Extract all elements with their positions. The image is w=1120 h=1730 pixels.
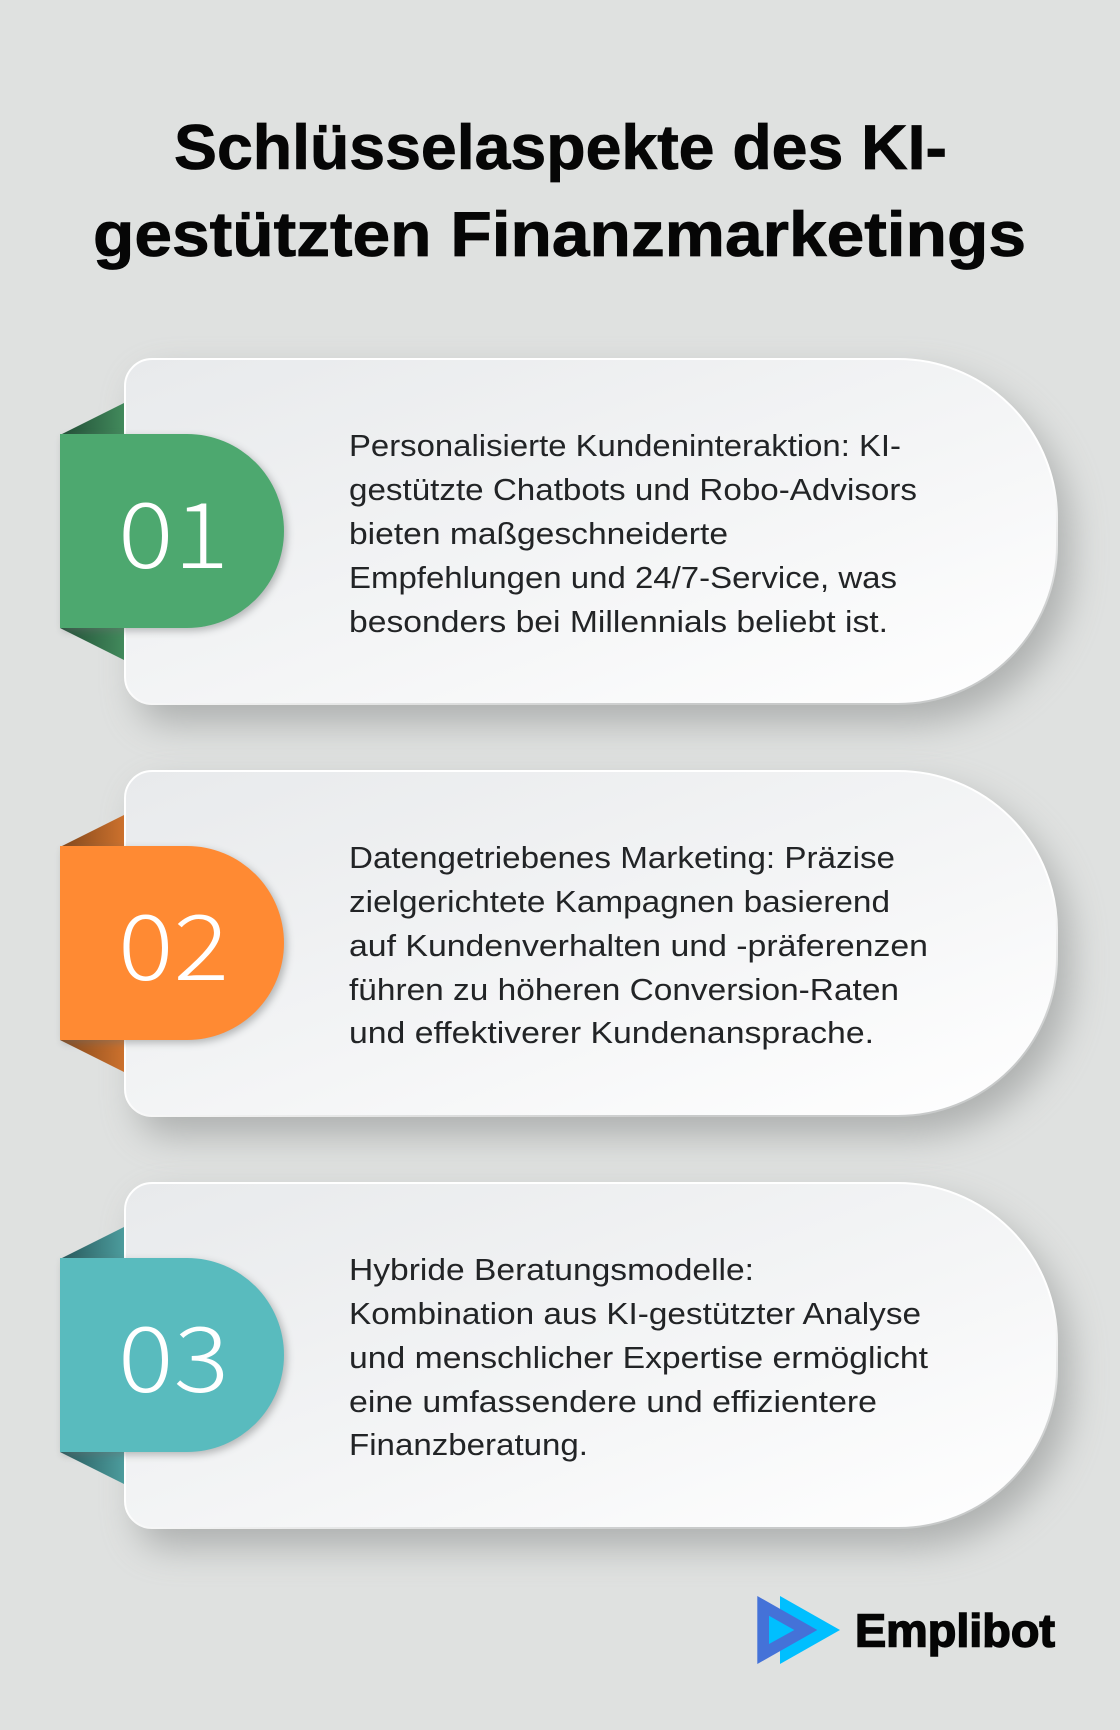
description 03: eine umfassendere und effizientere xyxy=(349,1384,877,1419)
number 03: 03 xyxy=(118,1287,229,1419)
ribbon fold top xyxy=(62,403,124,434)
description 01: gestützte Chatbots und Robo-Advisors xyxy=(349,472,917,507)
number 02: 02 xyxy=(118,875,229,1007)
title: Schlüsselaspekte des KI- xyxy=(174,113,947,183)
description 03 xyxy=(349,1252,928,1462)
wordmark: Emplibot xyxy=(855,1604,1055,1656)
description 03: und menschlicher Expertise ermöglicht xyxy=(349,1340,928,1375)
description 02: und effektiverer Kundenansprache. xyxy=(349,1015,874,1050)
description 01: Empfehlungen und 24/7-Service, was xyxy=(349,560,897,595)
description 03: Finanzberatung. xyxy=(349,1427,588,1462)
icon: play triangles xyxy=(757,1596,840,1664)
description 01: bieten maßgeschneiderte xyxy=(349,516,728,551)
description 03: Hybride Beratungsmodelle: xyxy=(349,1252,754,1287)
card background xyxy=(125,359,1057,704)
ribbon fold top xyxy=(62,815,124,846)
panel: step 02 xyxy=(60,771,1070,1135)
description 02: zielgerichtete Kampagnen basierend xyxy=(349,884,890,919)
badge shadow and shape xyxy=(60,1258,287,1455)
card background xyxy=(125,771,1057,1116)
description 01: besonders bei Millennials beliebt ist. xyxy=(349,604,888,639)
ribbon fold bottom xyxy=(60,1452,124,1484)
description 01 xyxy=(349,428,917,639)
title xyxy=(93,113,1026,270)
badge shadow and shape xyxy=(60,846,287,1043)
description 02: führen zu höheren Conversion-Raten xyxy=(349,972,899,1007)
description 03: Kombination aus KI-gestützter Analyse xyxy=(349,1296,921,1331)
ribbon fold bottom xyxy=(60,1040,124,1072)
description 01: Personalisierte Kundeninteraktion: KI- xyxy=(349,428,901,463)
panel: step 03 xyxy=(60,1183,1070,1547)
number 01: 01 xyxy=(118,463,229,595)
logo: Emplibot xyxy=(757,1596,1055,1664)
description 02: Datengetriebenes Marketing: Präzise xyxy=(349,840,895,875)
badge shadow and shape xyxy=(60,434,287,631)
description 02 xyxy=(349,840,928,1050)
title: gestützten Finanzmarketings xyxy=(93,200,1026,270)
panel: step 01 xyxy=(60,359,1070,723)
ribbon fold top xyxy=(62,1227,124,1258)
description 02: auf Kundenverhalten und -präferenzen xyxy=(349,928,928,963)
ribbon fold bottom xyxy=(60,628,124,660)
card background xyxy=(125,1183,1057,1528)
